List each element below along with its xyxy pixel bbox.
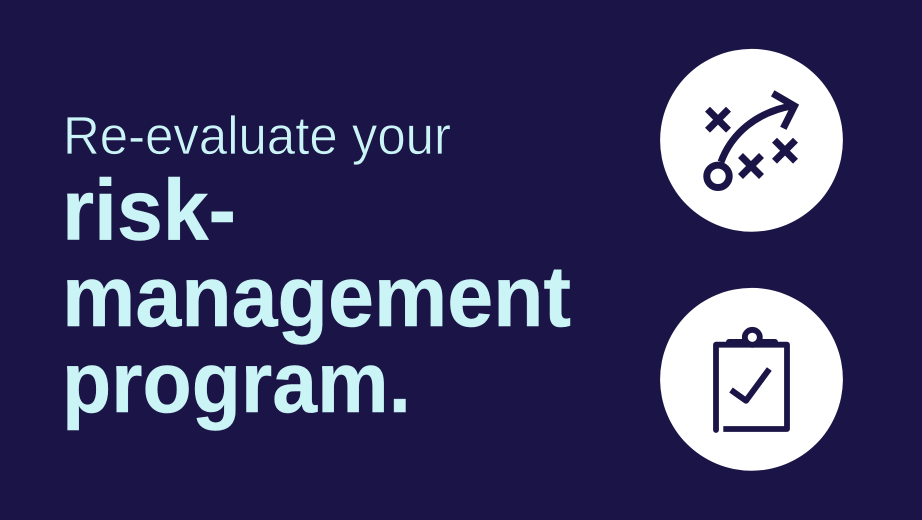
title: bold line program.: program. <box>62 335 411 431</box>
title: bold line management: management <box>62 249 571 345</box>
title: bold line risk-: risk- <box>62 162 236 258</box>
icon: clipboard with check mark in circle <box>660 288 843 471</box>
title <box>62 106 571 431</box>
title: light intro line: Re-evaluate your <box>63 106 451 166</box>
icon: strategy play diagram in circle <box>660 49 843 232</box>
